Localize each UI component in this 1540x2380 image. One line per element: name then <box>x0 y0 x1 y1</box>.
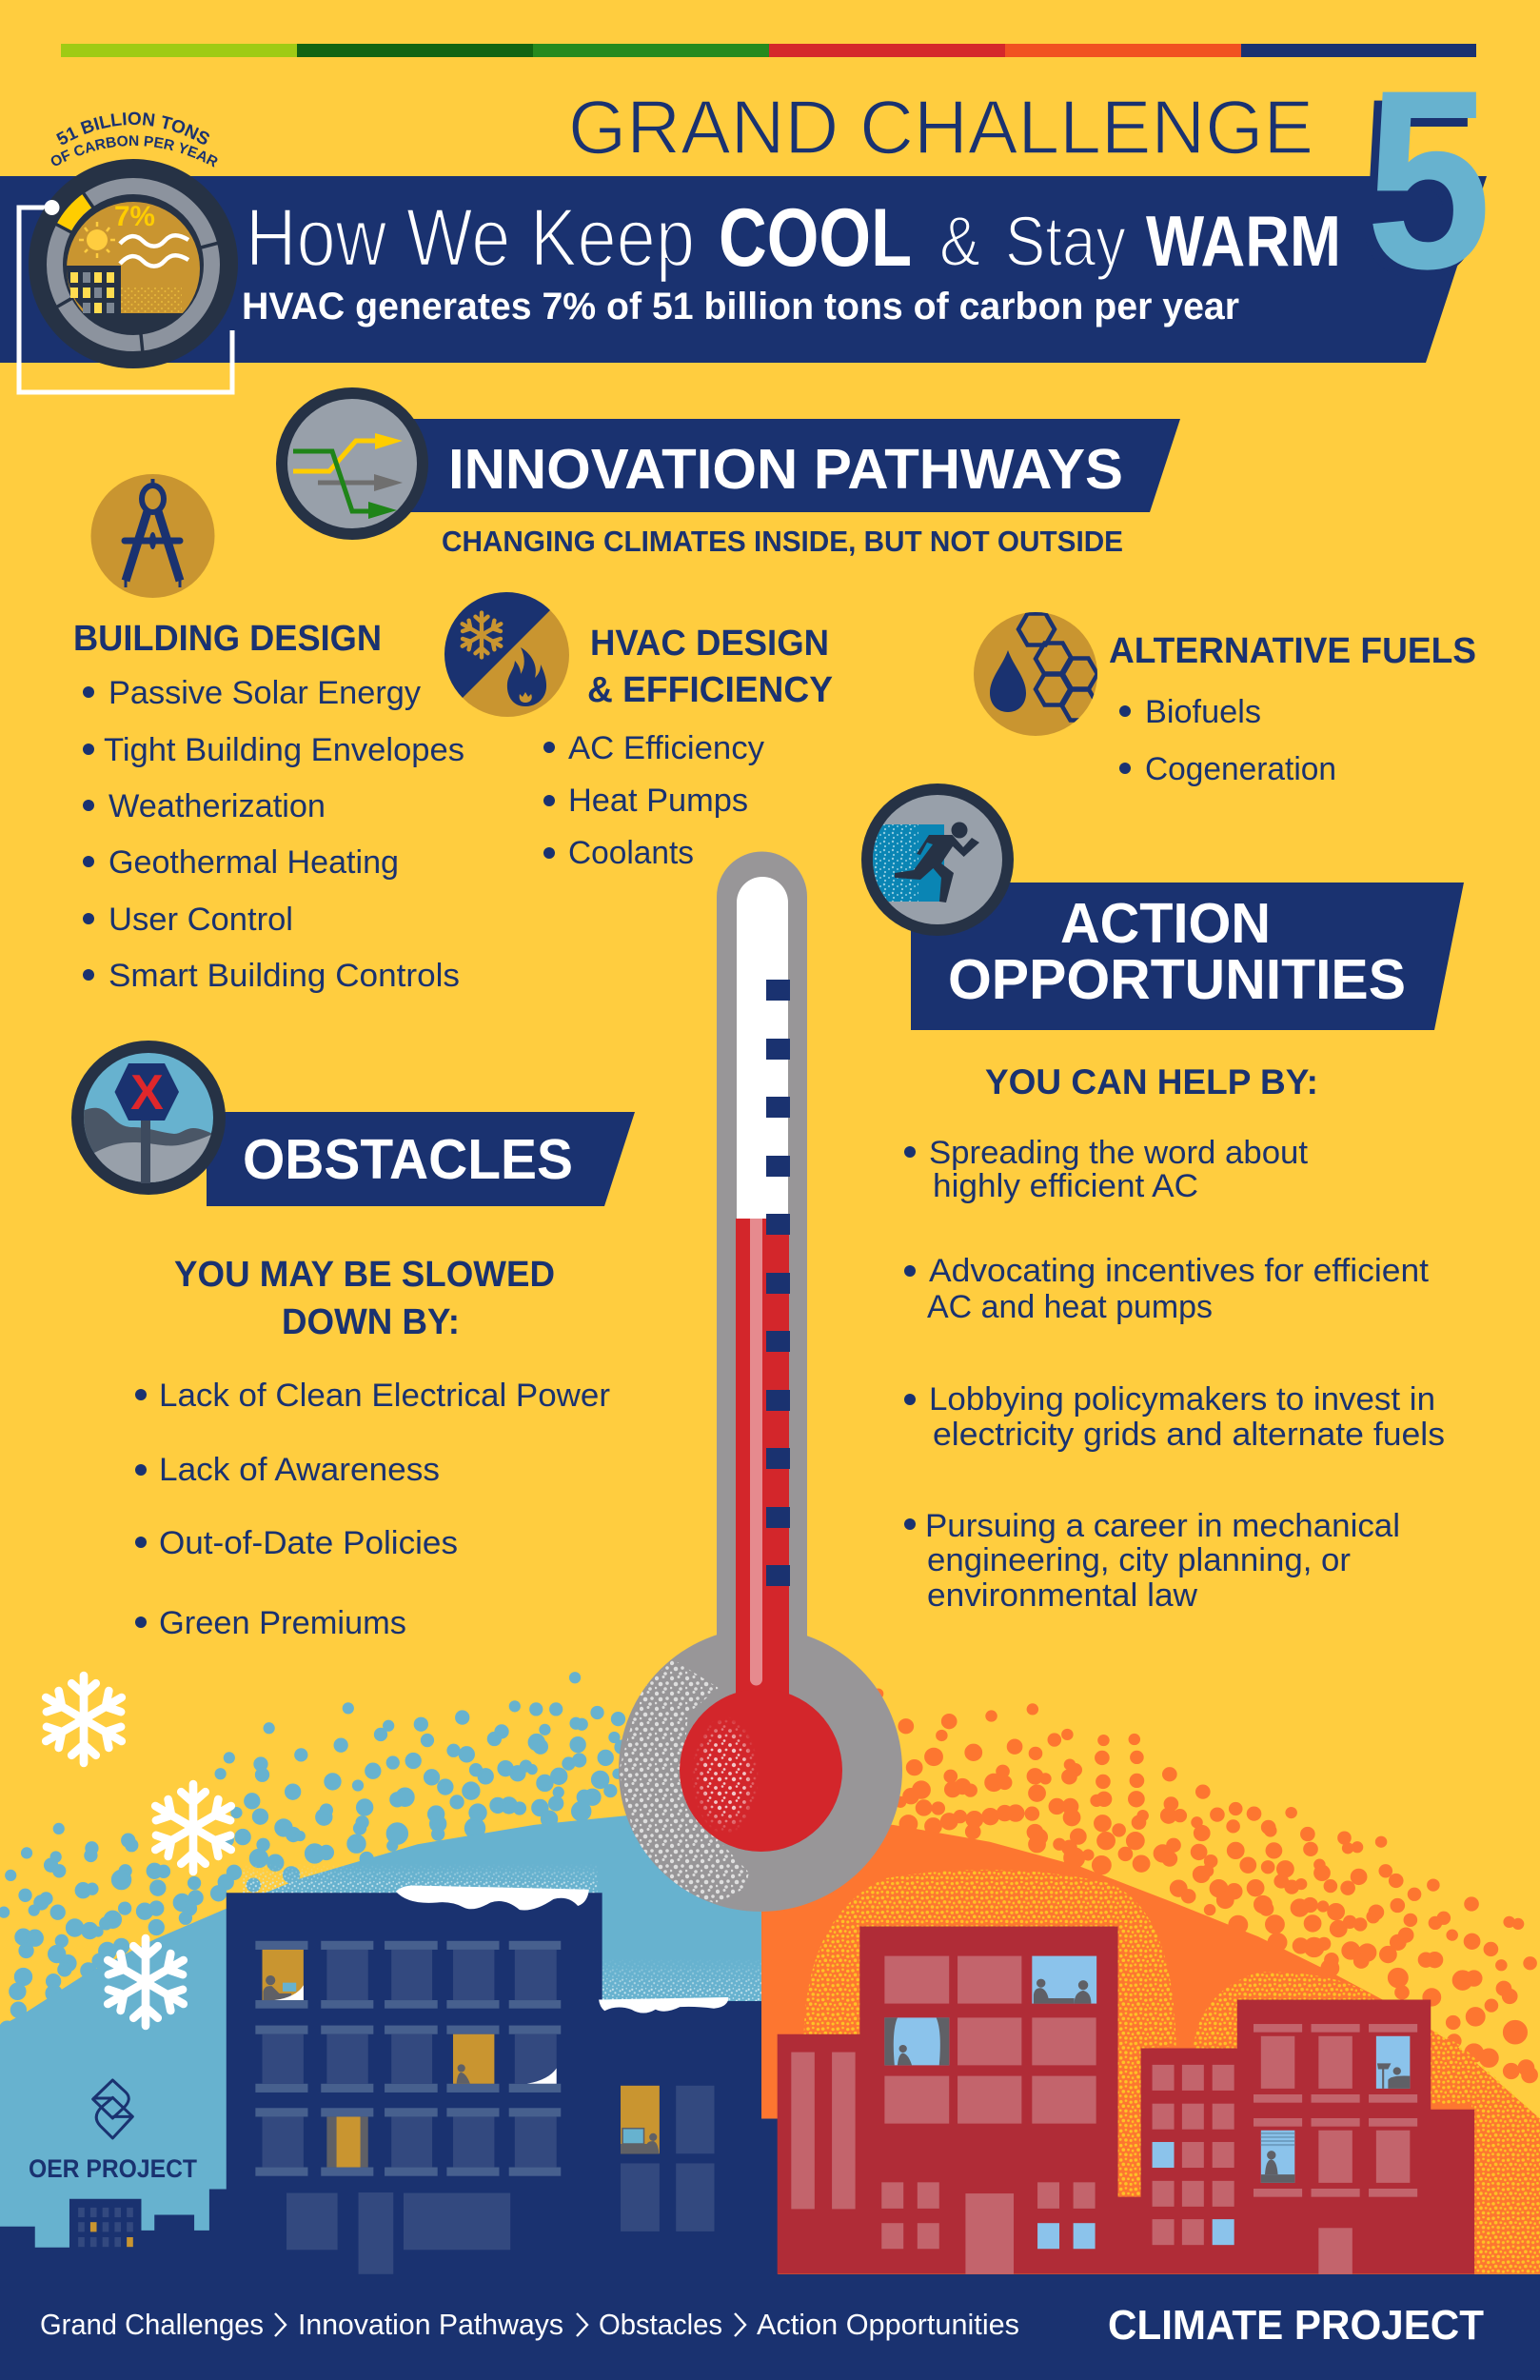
panel: action opportunities header <box>861 783 1464 1030</box>
list: obstacle items <box>135 1378 610 1641</box>
title text: & <box>939 202 980 281</box>
list: obstacle items: Out-of-Date Policies <box>159 1525 458 1561</box>
scene: cold hill <box>0 1815 761 2248</box>
stipple on casing <box>619 1659 749 1904</box>
heading: obstacles: OBSTACLES <box>243 1128 573 1191</box>
scene: snowflakes <box>40 1676 237 2026</box>
list: action items: engineering, city planning, or <box>927 1542 1351 1578</box>
list: fuels items <box>1119 694 1336 787</box>
heading: Grand Challenge: GRAND CHALLENGE <box>568 85 1313 169</box>
curled blinds <box>274 1985 304 2000</box>
list: action items: highly efficient AC <box>933 1168 1198 1204</box>
panel: building design <box>73 619 464 994</box>
heading: action opportunities: OPPORTUNITIES <box>948 948 1406 1011</box>
list: building design items: Passive Solar Energy <box>109 675 421 711</box>
thermometer bulb casing <box>619 1628 902 1912</box>
warm building windows <box>791 1956 1417 2274</box>
subtitle: HVAC generates 7% of 51 billion tons of carbon per year <box>242 286 1239 327</box>
thermometer <box>619 851 902 1912</box>
heading: action opportunities: ACTION <box>1060 892 1271 955</box>
heading: innovation pathways: INNOVATION PATHWAYS <box>448 438 1123 501</box>
list: action items <box>904 1135 1445 1614</box>
temperature ticks <box>766 980 790 1586</box>
panel: obstacles header <box>71 1041 635 1206</box>
heading: hvac design: & EFFICIENCY <box>587 670 833 710</box>
heading: alternative fuels: ALTERNATIVE FUELS <box>1109 631 1476 671</box>
list: action items: Advocating incentives for efficient <box>929 1253 1430 1289</box>
footer breadcrumb: Action Opportunities <box>757 2308 1019 2341</box>
title text: How We Keep <box>246 192 695 284</box>
title text: Stay <box>1005 202 1126 281</box>
list: fuels items: Biofuels <box>1145 694 1261 730</box>
heading: action opportunities <box>948 892 1406 1011</box>
number 5: 5 <box>1357 45 1483 330</box>
title text: COOL <box>719 192 912 284</box>
bracket callout line <box>19 208 232 392</box>
cold building windows <box>263 1950 715 2274</box>
panel: alternative fuels <box>1109 631 1476 787</box>
list: obstacle items: Lack of Clean Electrical Power <box>159 1378 610 1414</box>
title text <box>246 192 1341 284</box>
footer breadcrumb: Grand Challenges <box>40 2308 264 2341</box>
list: building design items <box>83 675 464 994</box>
icon: snow and flame <box>444 592 569 717</box>
scene: orange heat bubbles <box>874 1690 1536 2082</box>
scene: navy skyline and cold buildings <box>0 1885 778 2380</box>
silhouettes in cool windows <box>884 1979 1410 2183</box>
list: building design items: Geothermal Heating <box>109 844 399 881</box>
heading: hvac design <box>587 624 833 710</box>
list: building design items: User Control <box>109 902 293 938</box>
subheading: you can help by: YOU CAN HELP BY: <box>985 1062 1318 1101</box>
top colour bar <box>61 44 1476 57</box>
subheading: you may be slowed down by <box>174 1255 555 1342</box>
list: hvac items <box>543 730 764 871</box>
icon: road sign <box>71 1041 226 1195</box>
panel: action list <box>904 1062 1445 1614</box>
list: hvac items: AC Efficiency <box>568 730 764 766</box>
red mercury column <box>680 1219 842 1852</box>
footer breadcrumb: Obstacles <box>599 2308 722 2341</box>
silhouettes in lit windows <box>264 1975 659 2153</box>
window sills <box>255 1941 561 2176</box>
icon: road sign: X <box>130 1065 164 1121</box>
list: action items: environmental law <box>927 1577 1197 1614</box>
title banner <box>0 176 1487 363</box>
list: fuels items: Cogeneration <box>1145 751 1336 787</box>
icon: carbon gauge <box>29 159 238 368</box>
icon: fuel drop and hexagons <box>974 612 1097 736</box>
number 5: 5 <box>1366 36 1491 322</box>
panel: innovation pathways header <box>276 387 1180 540</box>
list: obstacle items: Lack of Awareness <box>159 1452 440 1488</box>
list: action items: Lobbying policymakers to invest in <box>929 1381 1435 1418</box>
scene: hot hill <box>761 1822 1540 2274</box>
icon: carbon gauge: 7% <box>114 201 155 232</box>
scene: red warm buildings <box>778 1926 1474 2274</box>
icon: compass <box>91 474 215 598</box>
icon: running figure <box>861 783 1014 936</box>
list: action items: Spreading the word about <box>929 1135 1309 1171</box>
icon: pathways arrows <box>276 387 428 540</box>
panel: hvac design and efficiency <box>543 624 833 871</box>
list: action items: electricity grids and alternate fuels <box>933 1417 1445 1453</box>
footer brand: Climate Project: CLIMATE PROJECT <box>1108 2302 1484 2349</box>
heading: building design: BUILDING DESIGN <box>73 619 382 659</box>
footer breadcrumb: Innovation Pathways <box>298 2308 563 2341</box>
logo mark <box>93 2080 132 2138</box>
list: hvac items: Heat Pumps <box>568 783 748 819</box>
list: hvac items: Coolants <box>568 835 694 871</box>
curved label: 51 billion tons <box>51 112 217 168</box>
list: building design items: Tight Building Envelopes <box>104 732 464 768</box>
footer breadcrumb <box>40 2308 1019 2341</box>
panel: obstacles list <box>135 1255 610 1641</box>
logo: OER Project <box>29 2080 197 2183</box>
curved label: 51 billion tons: OF CARBON PER YEAR <box>51 135 217 168</box>
list: building design items: Weatherization <box>109 788 326 824</box>
curved label: 51 billion tons: 51 BILLION TONS <box>56 112 209 145</box>
footer band <box>0 2274 1540 2380</box>
list: action items: Pursuing a career in mechanical <box>925 1508 1400 1544</box>
list: building design items: Smart Building Controls <box>109 958 460 994</box>
list: action items: AC and heat pumps <box>927 1289 1213 1325</box>
subheading: changing climates: CHANGING CLIMATES INSIDE, BUT NOT OUTSIDE <box>442 525 1123 558</box>
heading: hvac design: HVAC DESIGN <box>590 624 829 664</box>
title text: WARM <box>1146 201 1341 281</box>
subheading: you may be slowed down by: YOU MAY BE SLOWED <box>174 1255 555 1295</box>
computer screens <box>283 1983 296 1992</box>
subheading: you may be slowed down by: DOWN BY: <box>282 1302 460 1342</box>
scene: blue cold bubbles <box>0 1674 627 2035</box>
list: obstacle items: Green Premiums <box>159 1605 406 1641</box>
thermometer stem casing <box>717 851 807 1647</box>
window blinds <box>1261 2133 1294 2145</box>
small distant building windows <box>78 2208 133 2247</box>
roof snow <box>396 1885 589 1911</box>
logo wordmark: OER PROJECT <box>29 2154 197 2183</box>
